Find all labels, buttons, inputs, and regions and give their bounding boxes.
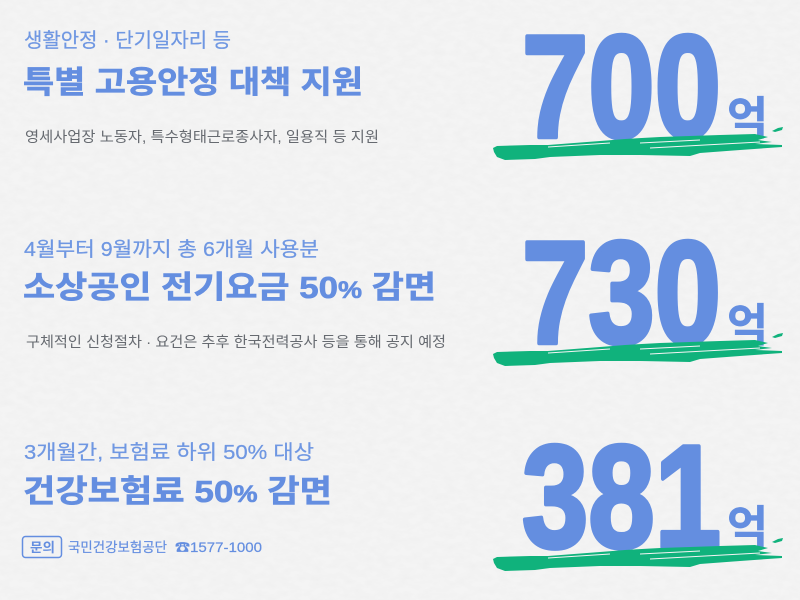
figure: 730억: 730 — [522, 211, 721, 374]
contact phone: ☎1577-1000 — [175, 540, 262, 555]
figure: 381억: 억 — [727, 502, 768, 553]
contact organisation: 국민건강보험공단 — [68, 540, 167, 555]
heading 2: 소상공인 전기요금 50 % 감면 — [23, 270, 436, 305]
figure: 700억: 억 — [727, 93, 768, 144]
subheading 3: 3개월간, 보험료 하위 50% 대상 — [24, 441, 314, 464]
heading 1: 특별 고용안정 대책 지원 — [23, 65, 363, 100]
subheading 2: 4월부터 9월까지 총 6개월 사용분 — [24, 238, 319, 261]
figure: 381억: 381 — [522, 415, 721, 578]
figure: 700억: 700 — [522, 5, 721, 168]
subheading 1: 생활안정 · 단기일자리 등 — [24, 29, 231, 52]
heading 3: 건강보험료 50 % 감면 — [23, 474, 332, 509]
description 2: 구체적인 신청절차 · 요건은 추후 한국전력공사 등을 통해 공지 예정 — [26, 334, 446, 351]
panel: 특별 고용안정 대책 지원 — [23, 5, 783, 168]
description 1: 영세사업장 노동자, 특수형태근로종사자, 일용직 등 지원 — [25, 129, 379, 146]
contact badge — [22, 536, 62, 558]
panel: 건강보험료 50% 감면 — [22, 415, 783, 578]
panel: 소상공인 전기요금 50% 감면 — [23, 211, 783, 374]
contact badge: 문의 — [30, 540, 55, 555]
figure: 730억: 억 — [727, 300, 768, 351]
